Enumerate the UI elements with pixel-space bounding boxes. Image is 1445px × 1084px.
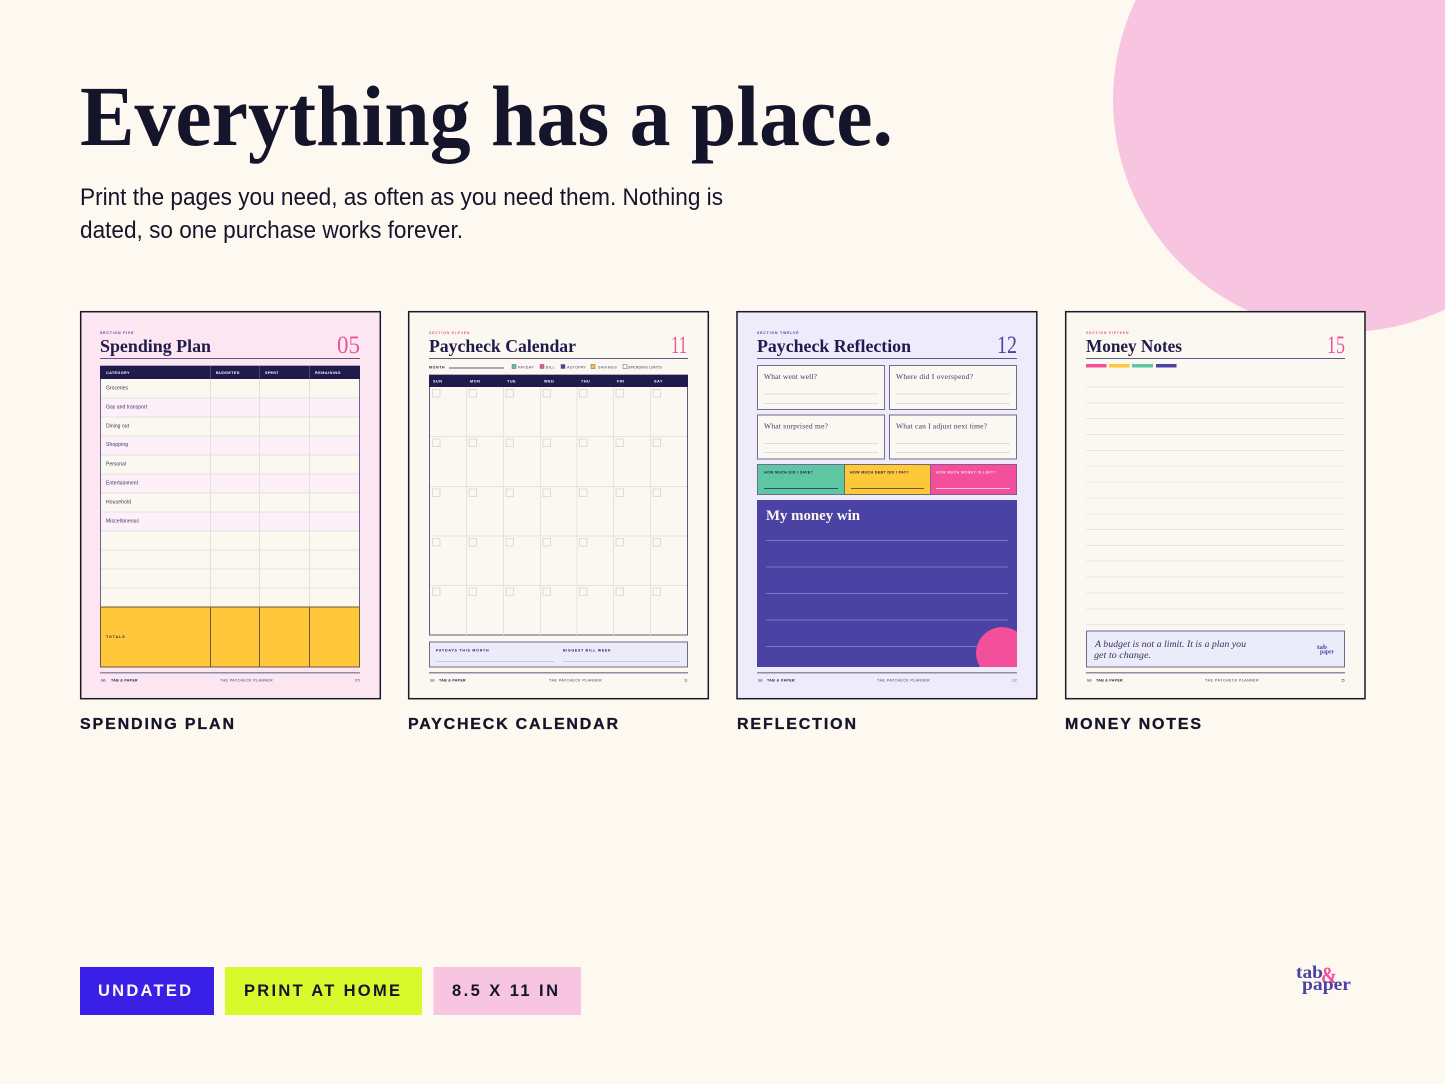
quote box: A budget is not a limit. It is a plan you: [1094, 640, 1246, 650]
page footer: THE PAYCHECK PLANNER: [877, 678, 930, 682]
paydays and bill summary box: PAYDAYS THIS MONTH: [436, 648, 489, 652]
page footer: [100, 672, 360, 682]
page footer: tab: [101, 678, 106, 682]
page number 11: 11: [671, 332, 687, 359]
spending table: [100, 366, 360, 667]
logo: tab and paper: [1296, 962, 1351, 994]
tag: print at home: PRINT AT HOME: [244, 982, 400, 1000]
spending table: Personal: [106, 462, 126, 468]
my money win block: My money win: [766, 508, 860, 524]
small logo: [1317, 645, 1334, 656]
legend: [429, 364, 662, 370]
prompt: what can I adjust next time: What can I adjust next time?: [896, 422, 988, 430]
page footer: tab: [430, 678, 435, 682]
page heading: paycheck calendar: Paycheck Calendar: [429, 336, 576, 356]
logo: tab and paper: &: [1321, 963, 1337, 988]
quote box: get to change.: [1094, 651, 1151, 661]
totals row: TOTALS: [106, 635, 125, 639]
page number 12: 12: [997, 332, 1017, 359]
page footer: [429, 672, 688, 682]
page footer: 11: [684, 678, 688, 682]
page number 05: 05: [337, 332, 360, 359]
page footer: tab: [1087, 678, 1092, 682]
page footer: tab: [758, 678, 763, 682]
ruled note lines: [1086, 387, 1345, 624]
page footer: 05: [355, 678, 360, 682]
legend: SAVINGS: [598, 366, 617, 370]
my money win block: [757, 500, 1017, 667]
page footer: 15: [1341, 678, 1345, 682]
decorative pink circle: [1113, 0, 1445, 332]
calendar grid: [429, 375, 688, 635]
legend: BILL: [546, 366, 555, 370]
prompt: what went well: [758, 366, 884, 410]
intro text: dated, so one purchase works forever.: [80, 217, 463, 244]
spending table: Dining out: [106, 424, 130, 430]
title: Everything has a place.: [80, 68, 893, 164]
page footer: [757, 672, 1017, 682]
page footer: THE PAYCHECK PLANNER: [220, 678, 273, 682]
caption: money notes: MONEY NOTES: [1065, 716, 1201, 733]
colour key bars: [1086, 364, 1176, 368]
page heading: paycheck reflection: Paycheck Reflection: [757, 336, 911, 356]
legend: AUTOPAY: [567, 366, 586, 370]
panel: reflection page: [737, 312, 1037, 699]
page heading: spending plan: Spending Plan: [100, 336, 211, 356]
panel: paycheck calendar page: [409, 312, 708, 699]
page footer: TAB & PAPER: [111, 678, 138, 682]
small logo: tab: [1317, 645, 1328, 651]
calendar grid: THU: [581, 380, 590, 384]
caption: paycheck calendar: PAYCHECK CALENDAR: [408, 716, 618, 733]
pink corner circle: [976, 627, 1017, 667]
legend: PAYDAY: [518, 366, 534, 370]
logo: tab and paper: paper: [1302, 974, 1351, 994]
page footer: THE PAYCHECK PLANNER: [1205, 678, 1259, 682]
panel: paycheck calendar page: SECTION ELEVEN: [429, 331, 470, 335]
calendar grid: FRI: [617, 380, 625, 384]
totals row: [100, 607, 360, 667]
prompt: what surprised me: [758, 415, 884, 459]
tag: print at home: [225, 967, 422, 1015]
intro text: [80, 184, 723, 244]
prompt: what surprised me: What surprised me?: [764, 422, 829, 430]
spending table: SPENT: [265, 371, 279, 375]
intro text: Print the pages you need, as often as you need them. Nothing is: [80, 184, 723, 211]
caption: reflection: REFLECTION: [737, 716, 856, 733]
spending table: Gas and transport: [106, 404, 148, 410]
band: how much did I save: HOW MUCH DID I SAVE?: [764, 470, 813, 474]
page footer: TAB & PAPER: [1096, 678, 1123, 682]
legend: MONTH: [429, 366, 445, 370]
panel: money notes page: SECTION FIFTEEN: [1086, 331, 1129, 335]
prompt: what can I adjust next time: [890, 415, 1016, 459]
spending table: Groceries: [106, 386, 128, 392]
band: how much did I save: [758, 464, 844, 494]
prompt: where did I overspend: [890, 366, 1016, 410]
page heading: money notes: Money Notes: [1086, 336, 1182, 356]
band: how much money is left: HOW MUCH MONEY IS LEFT?: [936, 470, 996, 474]
panel: money notes page: [1066, 312, 1365, 699]
spending table: Household: [106, 500, 131, 506]
band: how much debt did I pay: [844, 464, 930, 494]
spending table: Miscellaneous: [106, 518, 140, 524]
quote box: [1086, 631, 1344, 667]
page footer: TAB & PAPER: [439, 678, 466, 682]
tag: size: 8.5 X 11 IN: [452, 982, 558, 1000]
legend: SPENDING LIMITS: [628, 366, 662, 370]
page footer: THE PAYCHECK PLANNER: [549, 678, 602, 682]
spending table: REMAINING: [315, 371, 341, 375]
small logo: paper: [1320, 650, 1334, 656]
calendar grid: WED: [544, 380, 554, 384]
tag: size: [434, 967, 581, 1015]
prompt: where did I overspend: Where did I overspend?: [896, 372, 974, 381]
band: how much money is left: [930, 464, 1016, 494]
prompt: what went well: What went well?: [764, 372, 818, 381]
tag: undated: UNDATED: [98, 982, 191, 1000]
spending table: BUDGETED: [216, 371, 240, 375]
page footer: [1086, 672, 1345, 682]
calendar grid: SAT: [654, 380, 663, 384]
paydays and bill summary box: [430, 642, 688, 667]
spending table: Entertainment: [106, 480, 139, 486]
tag: undated: [80, 967, 214, 1015]
calendar grid: TUE: [507, 380, 516, 384]
band: how much debt did I pay: HOW MUCH DEBT DID I PAY?: [850, 470, 909, 474]
spending table: CATEGORY: [106, 371, 130, 375]
panel: spending plan page: [81, 312, 380, 699]
panel: reflection page: SECTION TWELVE: [757, 331, 799, 335]
page footer: 12: [1012, 678, 1017, 682]
panel: spending plan page: SECTION FIVE: [100, 331, 134, 335]
paydays and bill summary box: BIGGEST BILL WEEK: [563, 648, 611, 652]
calendar grid: SUN: [433, 380, 443, 384]
page footer: TAB & PAPER: [767, 678, 795, 682]
logo: tab and paper: tab: [1296, 962, 1323, 982]
calendar grid: MON: [470, 380, 480, 384]
caption: spending plan: SPENDING PLAN: [80, 716, 234, 733]
page number 15: 15: [1327, 332, 1345, 359]
spending table: Shopping: [106, 442, 128, 448]
